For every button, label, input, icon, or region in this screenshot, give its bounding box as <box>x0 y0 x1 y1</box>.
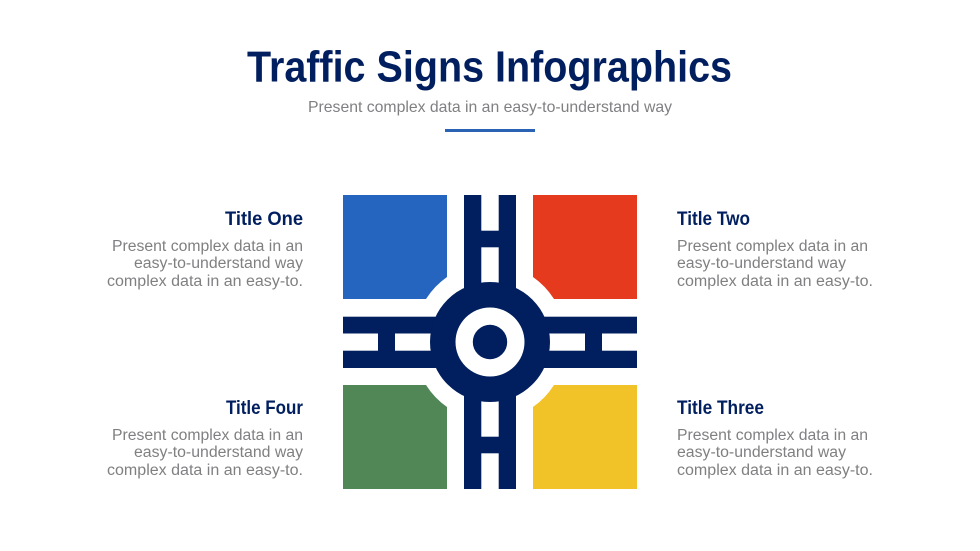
text block: Title One: Title One <box>225 208 303 230</box>
panel: green quadrant <box>343 385 447 489</box>
roundabout centre island <box>456 308 524 376</box>
text block: Title One: Present complex data in an <box>112 238 303 255</box>
roundabout diagram <box>343 195 637 489</box>
subtitle: Present complex data in an easy-to-understand way <box>308 99 672 116</box>
text block: Title Three <box>677 397 873 479</box>
panel: yellow quadrant <box>533 385 637 489</box>
text block: Title Two: easy-to-understand way <box>677 255 846 272</box>
text block: Title Two: Present complex data in an <box>677 238 868 255</box>
text block: Title Four <box>107 397 303 479</box>
text block: Title One: complex data in an easy-to. <box>107 273 303 290</box>
text block: Title Four: Title Four <box>226 397 303 419</box>
text block: Title Three: Present complex data in an <box>677 427 868 444</box>
text block: Title Two <box>677 208 873 290</box>
text block: Title One <box>107 208 303 290</box>
text block: Title Two: Title Two <box>677 208 750 230</box>
title underline <box>445 129 535 132</box>
panel: red quadrant <box>533 195 637 299</box>
text block: Title Three: easy-to-understand way <box>677 444 846 461</box>
text block: Title Four: easy-to-understand way <box>134 444 303 461</box>
text block: Title Two: complex data in an easy-to. <box>677 273 873 290</box>
text block: Title Four: complex data in an easy-to. <box>107 462 303 479</box>
title: Traffic Signs Infographics <box>247 44 732 92</box>
text block: Title Three: complex data in an easy-to. <box>677 462 873 479</box>
text block: Title Three: Title Three <box>677 397 764 419</box>
road network <box>343 195 637 489</box>
text block: Title One: easy-to-understand way <box>134 255 303 272</box>
panel: blue quadrant <box>343 195 447 299</box>
text block: Title Four: Present complex data in an <box>112 427 303 444</box>
